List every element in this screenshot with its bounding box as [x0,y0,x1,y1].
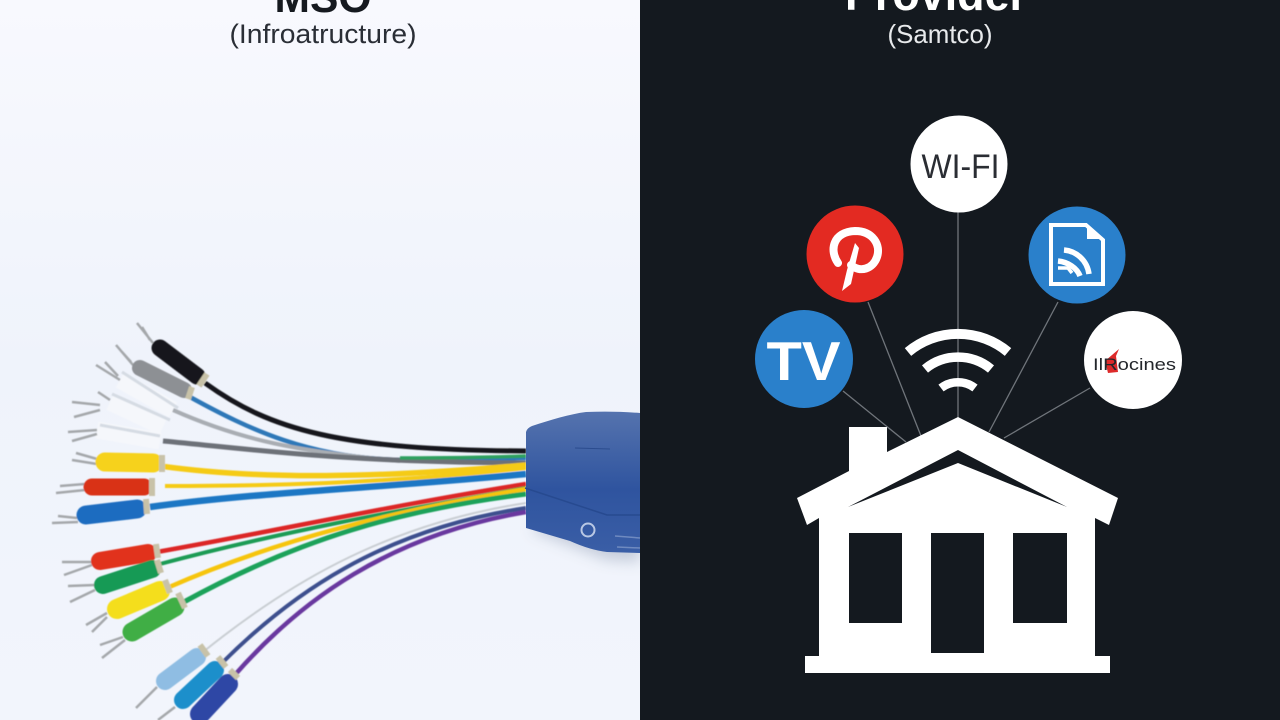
wires [205,383,526,451]
icon: Wi-Fi circle [910,116,1008,212]
icon: TV circle: TV [766,330,841,392]
icon: house [797,417,1118,673]
icon: document feed circle [1028,206,1126,304]
ferrules [146,374,238,678]
icon: Wi-Fi circle: WI-FI [922,148,1000,186]
icon: branded white circle: IlRocines [1093,355,1176,374]
metal tips [52,323,175,720]
illustration: cable bundle [52,323,526,720]
icon: wifi signal [908,334,1008,388]
panel: Provider service [640,0,1280,720]
connector lines [843,212,1090,442]
icon: TV circle [755,310,853,408]
illustration: blue connector [525,412,640,562]
icon: Pinterest circle [806,206,904,302]
handles [86,348,228,714]
subheading: infrastructure: (Infroatructure) [230,19,416,49]
icon: branded white circle [1084,311,1182,409]
pale sleeves [97,380,173,441]
panel: MSO infrastructure [0,0,640,720]
subheading: service: (Samtco) [888,19,992,49]
